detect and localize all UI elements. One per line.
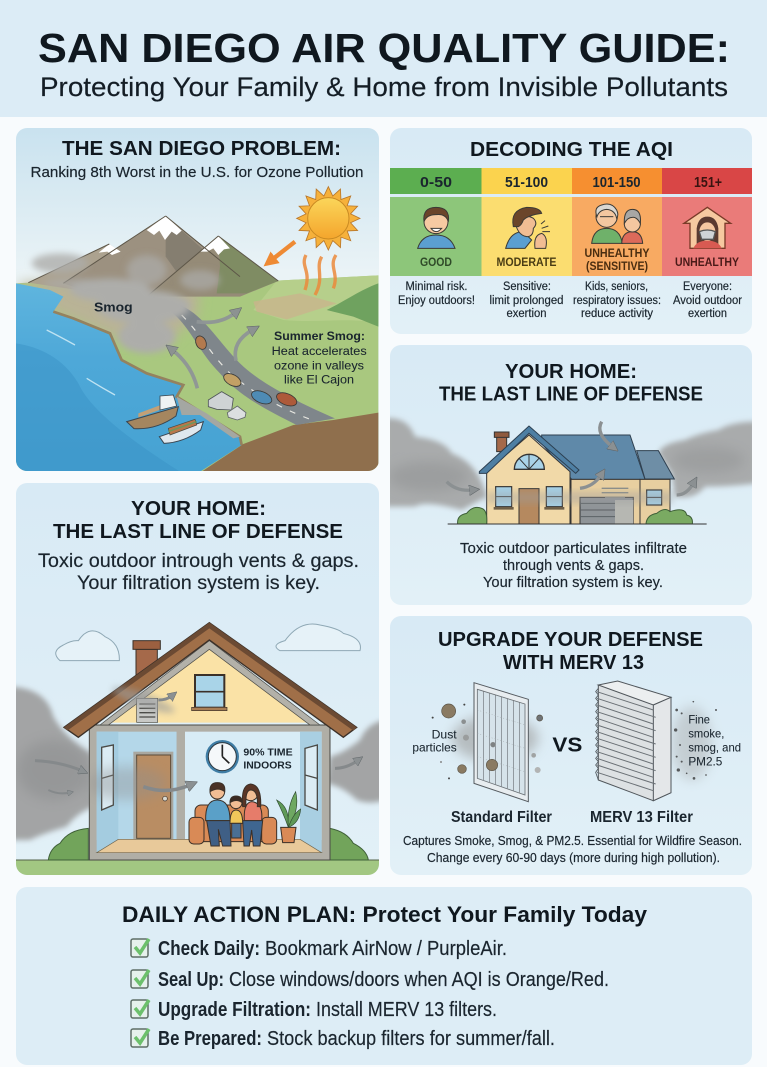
icon: checkbox	[131, 1000, 149, 1018]
roof	[64, 623, 357, 737]
callout: summer smog: Heat accelerates	[272, 345, 367, 358]
bushes	[458, 507, 692, 524]
checklist item: seal up: Close windows/doors when AQI is Orange/Red.	[229, 969, 609, 991]
header band	[0, 0, 767, 117]
MERV 13 pleated filter	[596, 681, 671, 801]
panel heading	[53, 501, 342, 538]
AQI column: good: Enjoy outdoors!	[398, 295, 475, 307]
potted plant	[277, 792, 301, 843]
VS label: VS	[552, 734, 582, 757]
caption: Change every 60-90 days (more during high pollution).	[427, 851, 720, 865]
label: 90% time indoors	[243, 748, 293, 771]
AQI column: good: Minimal risk.	[406, 281, 468, 293]
panel subheading: Ranking 8th Worst in the U.S. for Ozone Pollution	[30, 164, 364, 181]
sky clouds	[56, 624, 360, 661]
panel heading: THE LAST LINE OF DEFENSE	[53, 521, 343, 543]
coastal landscape illustration	[16, 187, 378, 472]
panel: your home, exterior	[385, 345, 757, 605]
label: fine smoke: Fine	[688, 713, 710, 726]
panel heading: WITH MERV 13	[503, 652, 644, 674]
brown foreground hill	[202, 413, 378, 472]
sun ray arrow	[272, 242, 295, 260]
icon: masked person in house	[684, 207, 731, 248]
checklist item: check daily	[131, 938, 507, 960]
caption: Captures Smoke, Smog, & PM2.5. Essential for Wildfire Season.	[403, 834, 742, 848]
AQI column: moderate: exertion	[506, 308, 546, 320]
icon: coughing person	[506, 207, 550, 248]
AQI column: good: GOOD	[420, 255, 452, 269]
floor	[97, 839, 322, 853]
label: 90% time indoors: 90% TIME	[243, 748, 293, 759]
AQI column: unhealthy: Everyone:	[683, 281, 732, 293]
AQI column: unhealthy for sensitive: (SENSITIVE)	[586, 261, 648, 273]
infiltration arrows	[447, 422, 693, 495]
AQI column: unhealthy: UNHEALTHY	[675, 255, 739, 269]
AQI column: unhealthy: 151+	[694, 175, 722, 191]
AQI column: good	[390, 168, 482, 307]
cargo ships	[127, 395, 203, 443]
icon: checkbox	[131, 970, 149, 988]
panel heading	[439, 364, 702, 400]
panel: daily action plan	[16, 887, 752, 1065]
body text: through vents & gaps.	[503, 557, 644, 574]
body text	[460, 540, 687, 591]
callout: summer smog: ozone in valleys	[274, 359, 364, 372]
checklist item: upgrade filtration: Upgrade Filtration:	[158, 999, 311, 1021]
icon: checkbox	[131, 939, 149, 957]
panel heading: DECODING THE AQI	[470, 139, 673, 161]
AQI column: unhealthy	[662, 168, 752, 320]
label: 90% time indoors: INDOORS	[243, 760, 292, 771]
ocean	[16, 283, 242, 472]
bushes	[48, 828, 368, 860]
chimney	[133, 641, 160, 679]
callout: summer smog: Summer Smog:	[274, 330, 365, 343]
panel heading: DAILY ACTION PLAN: Protect Your Family Today	[122, 902, 648, 927]
clock	[206, 740, 239, 773]
checklist item: be prepared	[131, 1028, 555, 1050]
label: dust particles: particles	[412, 742, 457, 755]
checklist item: upgrade filtration: Install MERV 13 filters.	[316, 999, 497, 1021]
checklist item: upgrade filtration	[131, 999, 497, 1021]
checklist item: check daily: Bookmark AirNow / PurpleAir.	[265, 938, 507, 960]
AQI column: moderate: Sensitive:	[503, 281, 551, 293]
smog behind filters	[452, 715, 538, 762]
smog entering room	[87, 767, 167, 800]
AQI column: unhealthy for sensitive: Kids, seniors,	[585, 281, 648, 293]
AQI column: unhealthy: Avoid outdoor	[673, 295, 742, 307]
AQI column: unhealthy for sensitive	[572, 168, 662, 320]
AQI column: unhealthy for sensitive: respiratory issues:	[573, 295, 661, 307]
heat waves	[304, 255, 336, 295]
AQI column: unhealthy: exertion	[688, 308, 727, 320]
AQI column: moderate: 51-100	[505, 175, 548, 191]
panel heading	[438, 629, 703, 674]
smog band across house	[487, 492, 673, 503]
AQI column: unhealthy for sensitive: reduce activity	[581, 308, 653, 320]
panel heading: THE SAN DIEGO PROBLEM:	[62, 138, 341, 160]
checklist item: be prepared: Stock backup filters for summer/fall.	[267, 1028, 555, 1050]
checklist item: check daily: Check Daily:	[158, 938, 260, 960]
title: SAN DIEGO AIR QUALITY GUIDE:	[38, 25, 730, 71]
panel heading: YOUR HOME:	[131, 498, 266, 520]
icon: elderly couple	[592, 204, 643, 243]
attic vent	[137, 698, 158, 722]
dust particles	[432, 704, 543, 779]
label: standard filter: Standard Filter	[451, 809, 552, 826]
AQI column: moderate	[482, 168, 572, 320]
house illustration	[385, 418, 757, 524]
label: smog: Smog	[94, 300, 133, 315]
standard filter	[474, 683, 528, 802]
panel: the San Diego problem	[16, 128, 379, 472]
panel body text	[38, 551, 359, 594]
house shell	[89, 725, 330, 860]
label: dust particles	[412, 728, 457, 755]
AQI column: good: 0-50	[420, 175, 452, 191]
body text: Your filtration system is key.	[483, 574, 663, 591]
side windows	[102, 745, 317, 810]
checklist item: seal up: Seal Up:	[158, 969, 224, 991]
door	[133, 752, 173, 839]
panel: your home, interior	[10, 483, 385, 880]
highway	[176, 308, 335, 425]
label: fine smoke: smoke,	[688, 728, 724, 741]
callout: summer smog: like El Cajon	[284, 373, 354, 386]
smog clouds	[32, 253, 220, 353]
sun	[297, 187, 360, 250]
ground	[16, 860, 379, 875]
panel body text: Your filtration system is key.	[77, 573, 320, 594]
checklist item: be prepared: Be Prepared:	[158, 1028, 262, 1050]
smog clouds	[10, 687, 385, 840]
cutaway house illustration	[10, 623, 385, 880]
AQI column: unhealthy for sensitive: UNHEALTHY	[584, 248, 650, 260]
callout: summer smog	[272, 330, 367, 386]
cars	[194, 334, 299, 409]
icon: checkbox	[131, 1029, 149, 1047]
filter comparison illustration	[412, 681, 741, 802]
family on sofa	[189, 783, 277, 846]
AQI column: moderate: MODERATE	[496, 255, 556, 269]
panel heading: THE LAST LINE OF DEFENSE	[439, 384, 703, 406]
pollution arrows	[172, 313, 252, 388]
body text: Toxic outdoor particulates infiltrate	[460, 540, 687, 557]
infiltration arrows	[35, 696, 357, 793]
label: fine smoke: smog, and	[688, 742, 741, 755]
AQI column: unhealthy for sensitive: 101-150	[592, 175, 640, 191]
port buildings and dock	[177, 392, 246, 438]
icon: smiling boy	[418, 207, 455, 248]
rooms	[97, 732, 177, 840]
label: fine smoke	[688, 713, 741, 769]
AQI column: moderate: limit prolonged	[490, 295, 564, 307]
label: fine smoke: PM2.5	[688, 756, 722, 769]
caption	[403, 834, 742, 865]
smog clouds	[385, 418, 757, 510]
panel heading: UPGRADE YOUR DEFENSE	[438, 629, 703, 651]
attic	[107, 649, 312, 723]
attic window	[192, 675, 227, 711]
subtitle: Protecting Your Family & Home from Invisible Pollutants	[40, 72, 728, 102]
panel body text: Toxic outdoor intrough vents & gaps.	[38, 551, 359, 572]
panel: decoding the AQI	[390, 128, 752, 334]
label: MERV 13 filter: MERV 13 Filter	[590, 809, 693, 826]
panel: upgrade your defense	[390, 616, 752, 875]
label: dust particles: Dust	[432, 728, 457, 741]
panel heading: YOUR HOME:	[505, 361, 637, 383]
fine particles	[674, 701, 717, 780]
